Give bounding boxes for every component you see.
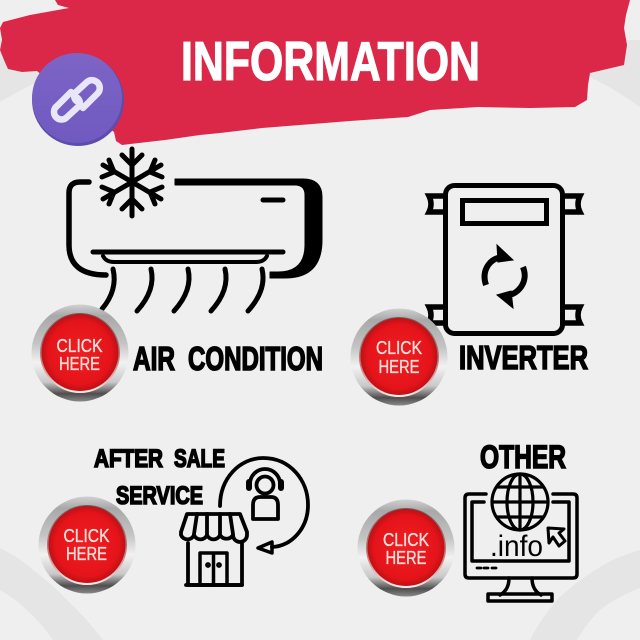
button: air condition: HERE bbox=[59, 354, 100, 374]
icon: air conditioner bbox=[69, 149, 322, 311]
button: after sale service: CLICK bbox=[64, 526, 110, 546]
label: other: OTHER bbox=[480, 439, 566, 475]
background arc: bottom left bbox=[0, 548, 103, 640]
label: air condition bbox=[133, 340, 323, 377]
icon: snowflake bbox=[102, 149, 162, 216]
button: other bbox=[358, 500, 454, 596]
button: other: CLICK bbox=[383, 530, 429, 550]
background arc: top band bbox=[0, 13, 640, 107]
label: after sale service: AFTER bbox=[94, 445, 163, 473]
label: after sale service bbox=[94, 445, 225, 510]
button: air condition: CLICK bbox=[56, 336, 102, 356]
button: inverter: HERE bbox=[378, 357, 420, 377]
icon: mounting brackets bbox=[429, 196, 580, 323]
label: after sale service: SALE bbox=[174, 445, 225, 473]
button: after sale service bbox=[38, 496, 136, 594]
icon: globe bbox=[492, 474, 548, 530]
icon: website monitor bbox=[465, 474, 577, 601]
label: inverter: INVERTER bbox=[459, 339, 588, 376]
icon: cursor bbox=[548, 528, 565, 546]
button: inverter: CLICK bbox=[376, 338, 422, 358]
icon: inverter bbox=[429, 186, 580, 334]
icon: shop bbox=[181, 514, 247, 585]
button: air condition bbox=[32, 304, 128, 402]
icon: agent bbox=[249, 469, 281, 519]
info text: .info bbox=[490, 530, 543, 563]
background arc: bottom right bbox=[530, 550, 640, 640]
title: INFORMATION bbox=[181, 30, 480, 92]
label: air condition: CONDITION bbox=[188, 340, 323, 377]
button: other: HERE bbox=[386, 548, 426, 568]
red brush banner bbox=[0, 0, 630, 145]
icon: cycle arrows bbox=[485, 245, 525, 308]
icon: link badge bbox=[32, 53, 124, 146]
label: after sale service: SERVICE bbox=[116, 482, 203, 510]
button: after sale service: HERE bbox=[66, 544, 107, 564]
icon: after sale service bbox=[181, 458, 308, 585]
button: inverter bbox=[350, 308, 448, 406]
label: air condition: AIR bbox=[133, 340, 175, 377]
